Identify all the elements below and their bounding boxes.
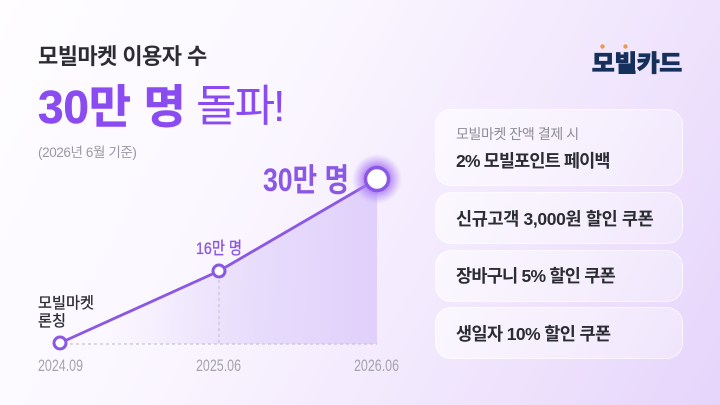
card text: 장바구니 5% 할인 쿠폰	[456, 266, 615, 286]
card text: 2% 모빌포인트 페이백	[456, 151, 610, 171]
label: 30만 명: 30만 명	[263, 162, 349, 198]
label: launch	[38, 294, 94, 330]
dashed drop line	[218, 280, 220, 344]
x-axis labels	[38, 357, 399, 375]
card text: 신규고객 3,000원 할인 쿠폰	[456, 209, 653, 229]
x-axis labels: 2024.09	[38, 357, 83, 375]
end marker	[366, 168, 388, 190]
label: launch: 론칭	[38, 312, 66, 330]
panel: new customer coupon	[435, 192, 683, 244]
chart area fill	[60, 179, 377, 344]
label: launch: 모빌마켓	[38, 294, 94, 312]
heading: subtitle: 모빌마켓 이용자 수	[38, 44, 207, 69]
heading: main title	[38, 81, 284, 133]
end marker glow	[352, 154, 402, 204]
growth line	[60, 179, 377, 343]
x-axis labels: 2025.06	[196, 357, 241, 375]
title emphasis: 30만 명	[38, 81, 186, 133]
middle marker	[213, 265, 225, 277]
label: 16만 명: 16만 명	[196, 239, 242, 258]
card text: 생일자 10% 할인 쿠폰	[456, 324, 611, 344]
title remainder: 돌파!	[196, 82, 284, 131]
panel: cart coupon	[435, 250, 683, 302]
panel: birthday coupon	[435, 307, 683, 359]
logo: 모빌카드: 모빌카드	[592, 50, 682, 76]
panel: payback benefit	[435, 109, 683, 186]
card caption: 모빌마켓 잔액 결제 시	[456, 126, 579, 142]
x-axis labels: 2026.06	[354, 357, 399, 375]
dashed baseline	[70, 343, 377, 345]
note: reference date: (2026년 6월 기준)	[38, 145, 137, 160]
start marker	[54, 337, 66, 349]
